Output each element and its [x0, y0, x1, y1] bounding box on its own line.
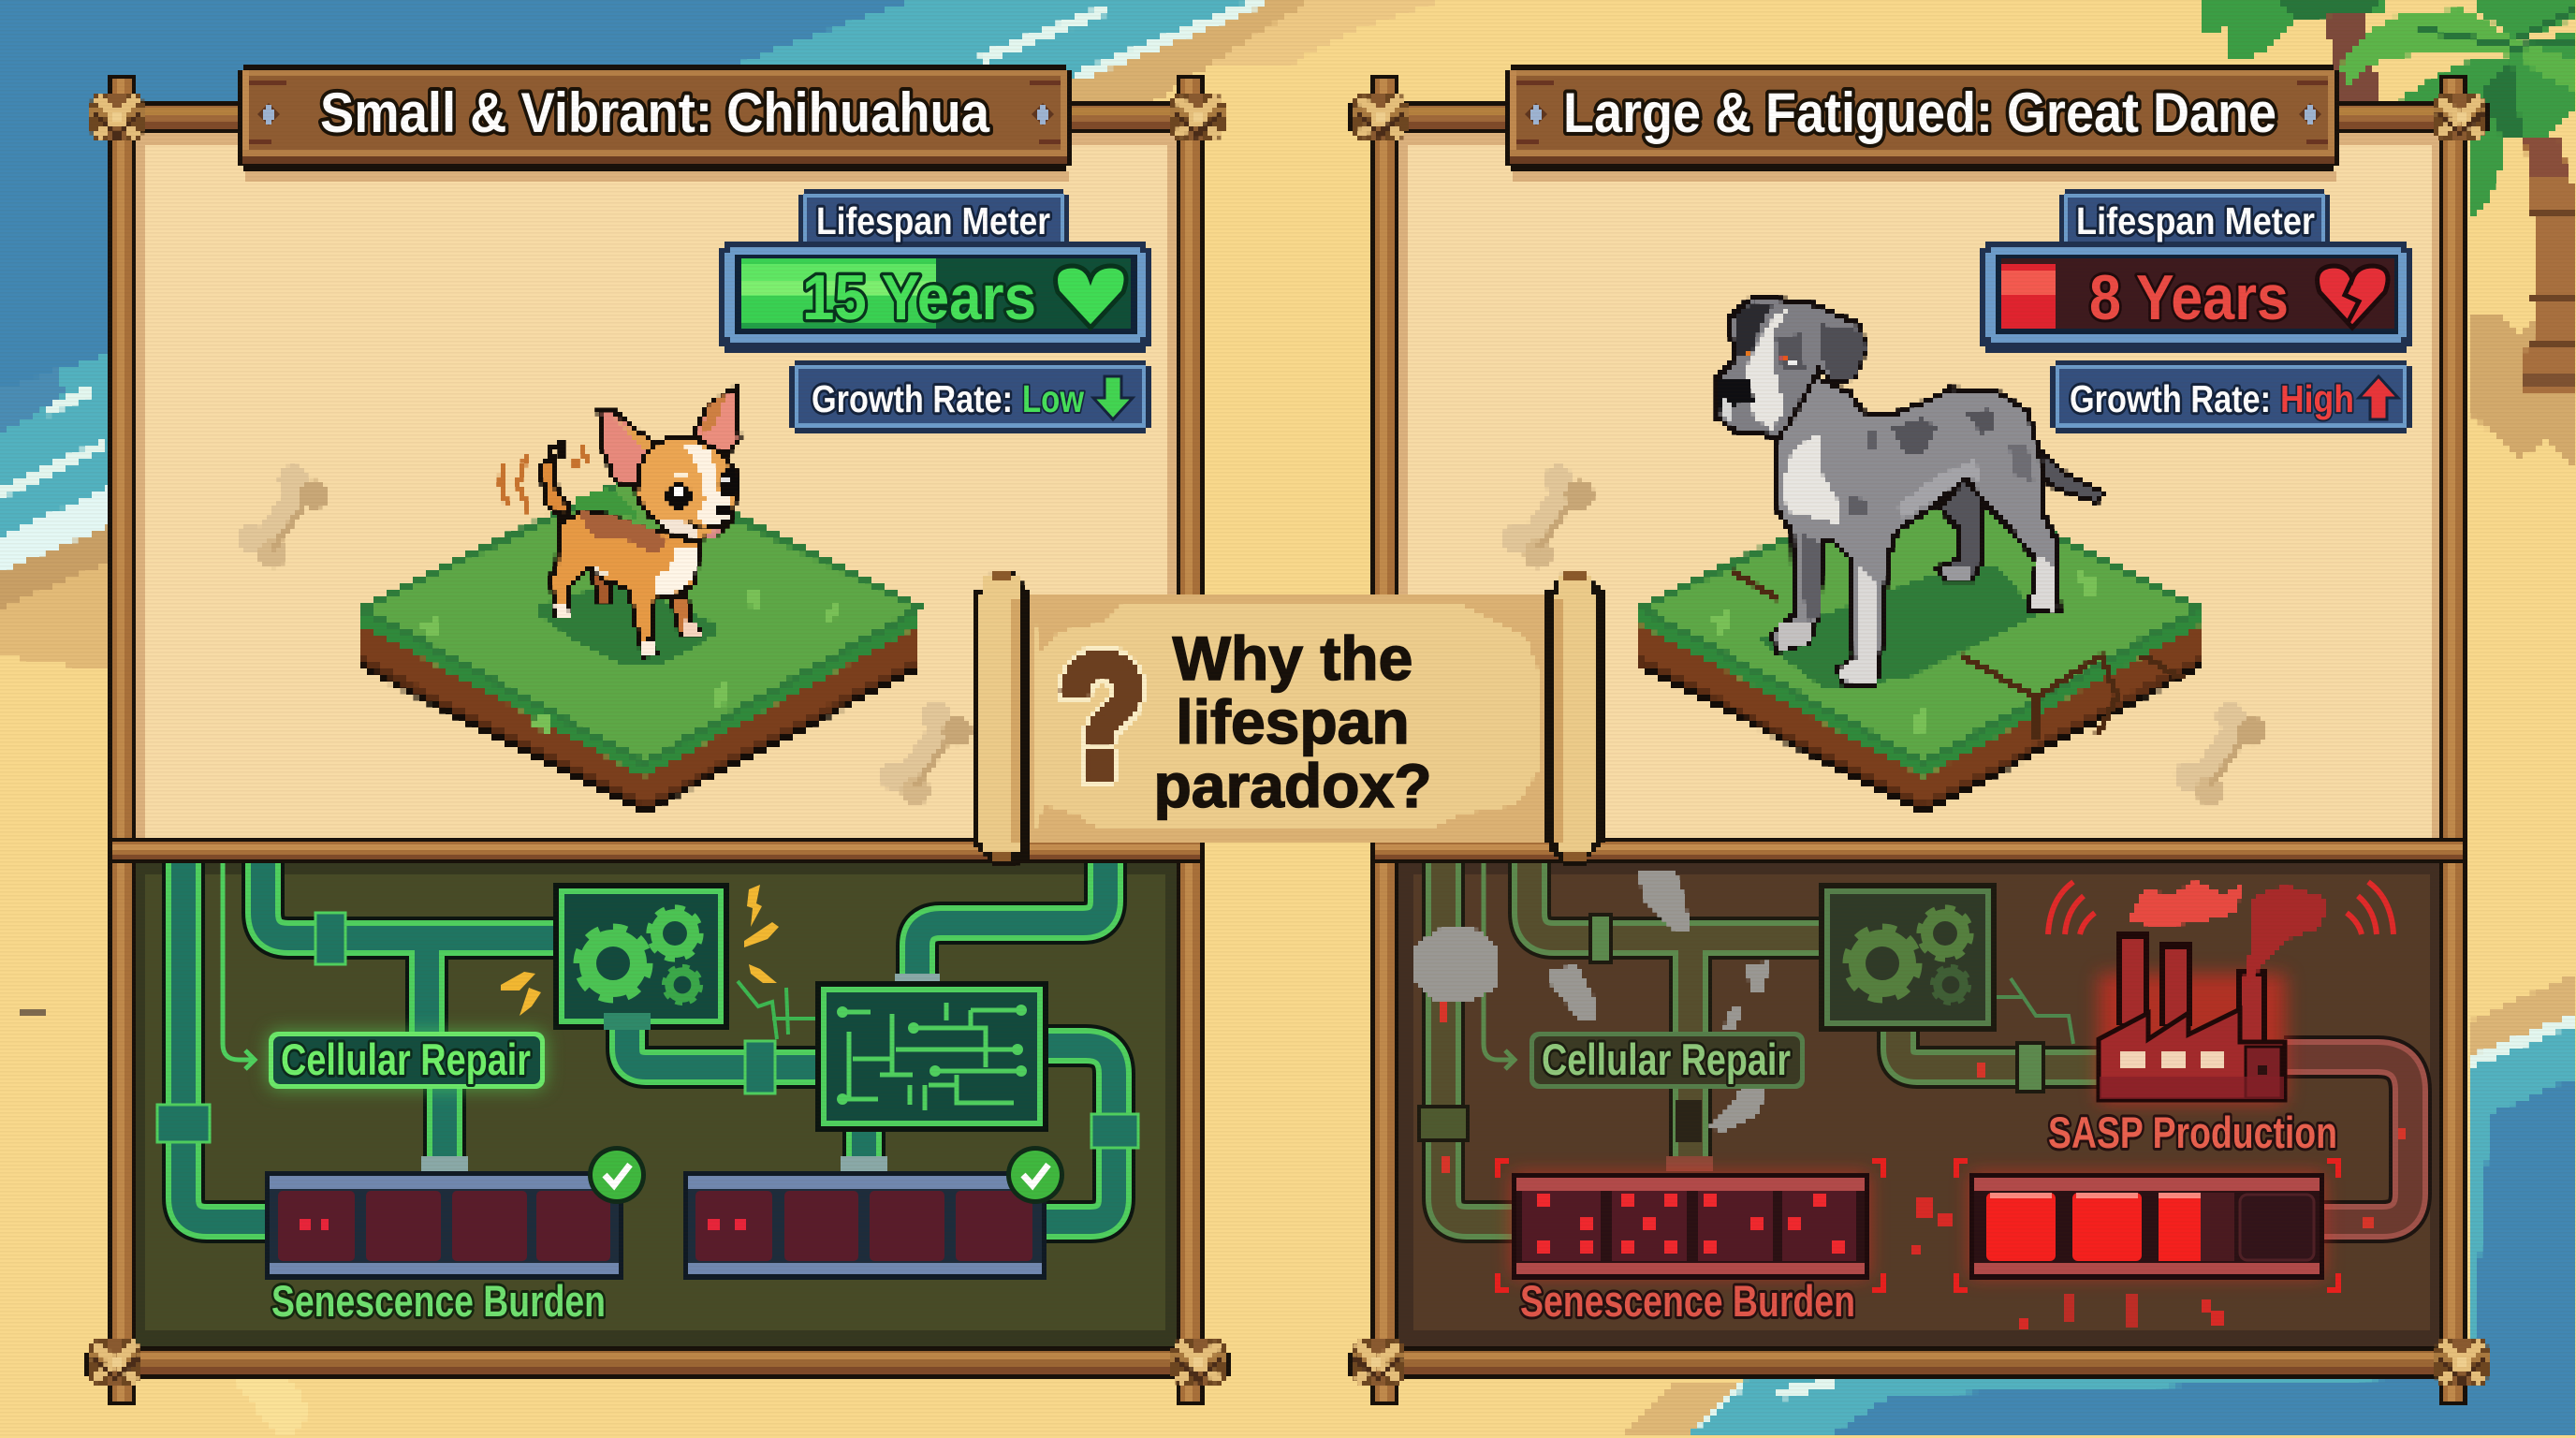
- scroll question text: [1153, 624, 1432, 820]
- icon: broken heart: [2318, 266, 2388, 328]
- signal arcs: [2048, 882, 2393, 934]
- palm trees: [2321, 5, 2378, 103]
- leaks: red embers on pipes: [1440, 1002, 2406, 1228]
- icon: check badge 1: [588, 1146, 646, 1204]
- icon: green heart: [1056, 266, 1126, 328]
- central question scroll: [973, 569, 1603, 864]
- scroll body: [973, 569, 1603, 864]
- great dane illustration: [1718, 297, 2103, 690]
- panel: great dane sandy habitat: [1397, 132, 2443, 840]
- lifespan meter and growth rate: chihuahua: Lifespan Meter: [816, 199, 1050, 242]
- grass platform: great dane: [1641, 472, 2200, 811]
- panel: great dane cell machinery background: [1398, 861, 2443, 1348]
- panel frame: great dane: [1370, 75, 2467, 1405]
- senescence tank 2: chihuahua: [683, 1171, 1046, 1280]
- pipe couplings: [157, 913, 1138, 1171]
- sparks: [501, 885, 779, 1016]
- title sign: chihuahua: Small & Vibrant: Chihuahua: [320, 81, 990, 144]
- circuit machine: [815, 981, 1048, 1132]
- chihuahua illustration: [501, 387, 739, 665]
- tank glows: [1512, 1173, 2324, 1277]
- lifespan meter and growth rate: chihuahua: Growth Rate:: [812, 377, 1013, 420]
- icon: down arrow: [1093, 376, 1133, 419]
- icon: question mark: ?: [1058, 621, 1146, 814]
- lifespan meter and growth rate: great dane: High: [2280, 377, 2354, 420]
- panel frame: chihuahua: [108, 75, 1205, 1405]
- copper pipe: [2284, 1057, 2410, 1222]
- dim gear machine: [1819, 883, 1997, 1032]
- scroll question text: paradox?: [1153, 751, 1432, 820]
- title sign: chihuahua: [238, 65, 1072, 182]
- warning brackets and particles: [1498, 1161, 2338, 1329]
- label: senescence burden (great dane): Senescence Burden: [1520, 1276, 1855, 1326]
- scroll question text: Why the: [1173, 624, 1412, 693]
- icon: SASP factory: [2099, 932, 2285, 1100]
- decorative bones: [231, 460, 2272, 811]
- gear machine: [553, 883, 729, 1030]
- grass platform: chihuahua: [361, 472, 920, 811]
- icon: up arrow: [2359, 376, 2398, 419]
- label glow: [269, 1032, 545, 1089]
- rusty pipe coupling details: [1417, 913, 2045, 1171]
- label: cellular repair (chihuahua): Cellular Repair: [281, 1034, 531, 1084]
- lifespan meter and growth rate: great dane: [1980, 189, 2412, 433]
- panel: chihuahua sandy habitat: [134, 132, 1178, 840]
- label: senescence burden (chihuahua): Senescence Burden: [271, 1276, 606, 1326]
- lifespan meter and growth rate: great dane: Lifespan Meter: [2076, 199, 2315, 242]
- red smoke: [2128, 881, 2328, 988]
- machinery: great dane failing pipes: [1414, 863, 2410, 1228]
- lifespan meter and growth rate: chihuahua: Low: [1022, 377, 1084, 420]
- label: SASP production: SASP Production: [2048, 1108, 2337, 1157]
- lifespan meter and growth rate: chihuahua: 15 Years: [802, 262, 1036, 333]
- SASP tank: great dane: [1969, 1173, 2324, 1280]
- senescence tank 1: great dane, full: [1512, 1173, 1869, 1280]
- scroll question text: lifespan: [1176, 687, 1410, 756]
- icon: question mark: ?: [1058, 621, 1146, 814]
- steam leaks: [1414, 871, 1769, 1132]
- title sign: great dane: Large & Fatigued: Great Dane: [1563, 81, 2276, 144]
- machinery: chihuahua healthy pipes: [157, 863, 1138, 1222]
- lifespan meter and growth rate: great dane: 8 Years: [2089, 262, 2289, 333]
- label: cellular repair (great dane, dimmed): Cellular Repair: [1542, 1034, 1791, 1084]
- lifespan meter and growth rate: great dane: Growth Rate:: [2070, 377, 2271, 420]
- senescence tank 1: chihuahua: [265, 1171, 623, 1280]
- ground cracks on great dane platform: [1732, 571, 2183, 740]
- icon: check badge 2: [1006, 1146, 1064, 1204]
- factory glow: [2099, 974, 2286, 1103]
- title sign: great dane: [1505, 65, 2339, 182]
- lifespan meter and growth rate: chihuahua: [719, 189, 1151, 433]
- panel: chihuahua cell machinery background: [133, 861, 1179, 1348]
